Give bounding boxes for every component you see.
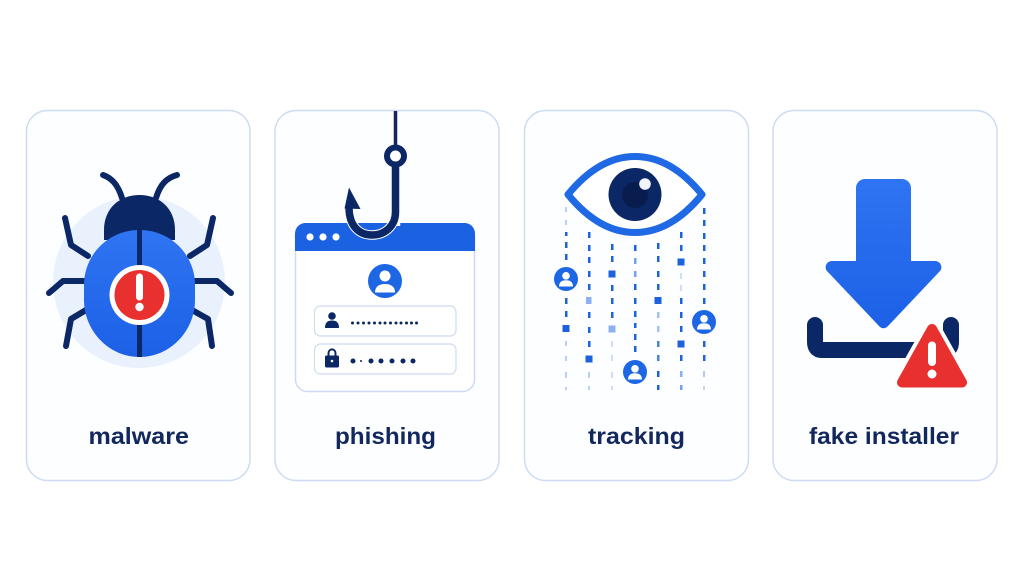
data streams — [562, 207, 706, 390]
username field — [314, 306, 456, 336]
label: tracking: tracking — [588, 423, 685, 449]
label: malware: malware — [88, 423, 189, 449]
icon: bug with alert badge — [49, 175, 231, 368]
card: tracking — [524, 110, 748, 480]
avatar — [368, 264, 402, 298]
login window — [295, 223, 475, 392]
tracked user left — [554, 267, 578, 291]
tracked user right — [692, 310, 716, 334]
icon: download arrow — [826, 179, 941, 328]
label: phishing: phishing — [335, 423, 436, 449]
tracked user bottom — [623, 360, 647, 384]
password field — [314, 344, 456, 374]
card: phishing — [275, 110, 499, 480]
icon: fishing hook — [344, 111, 404, 235]
label: fake installer: fake installer — [809, 423, 959, 449]
icon: warning triangle — [902, 329, 962, 382]
icon: eye — [568, 156, 702, 232]
card: fake installer — [773, 110, 997, 480]
card: malware — [26, 110, 250, 480]
icon: download tray — [815, 325, 951, 350]
